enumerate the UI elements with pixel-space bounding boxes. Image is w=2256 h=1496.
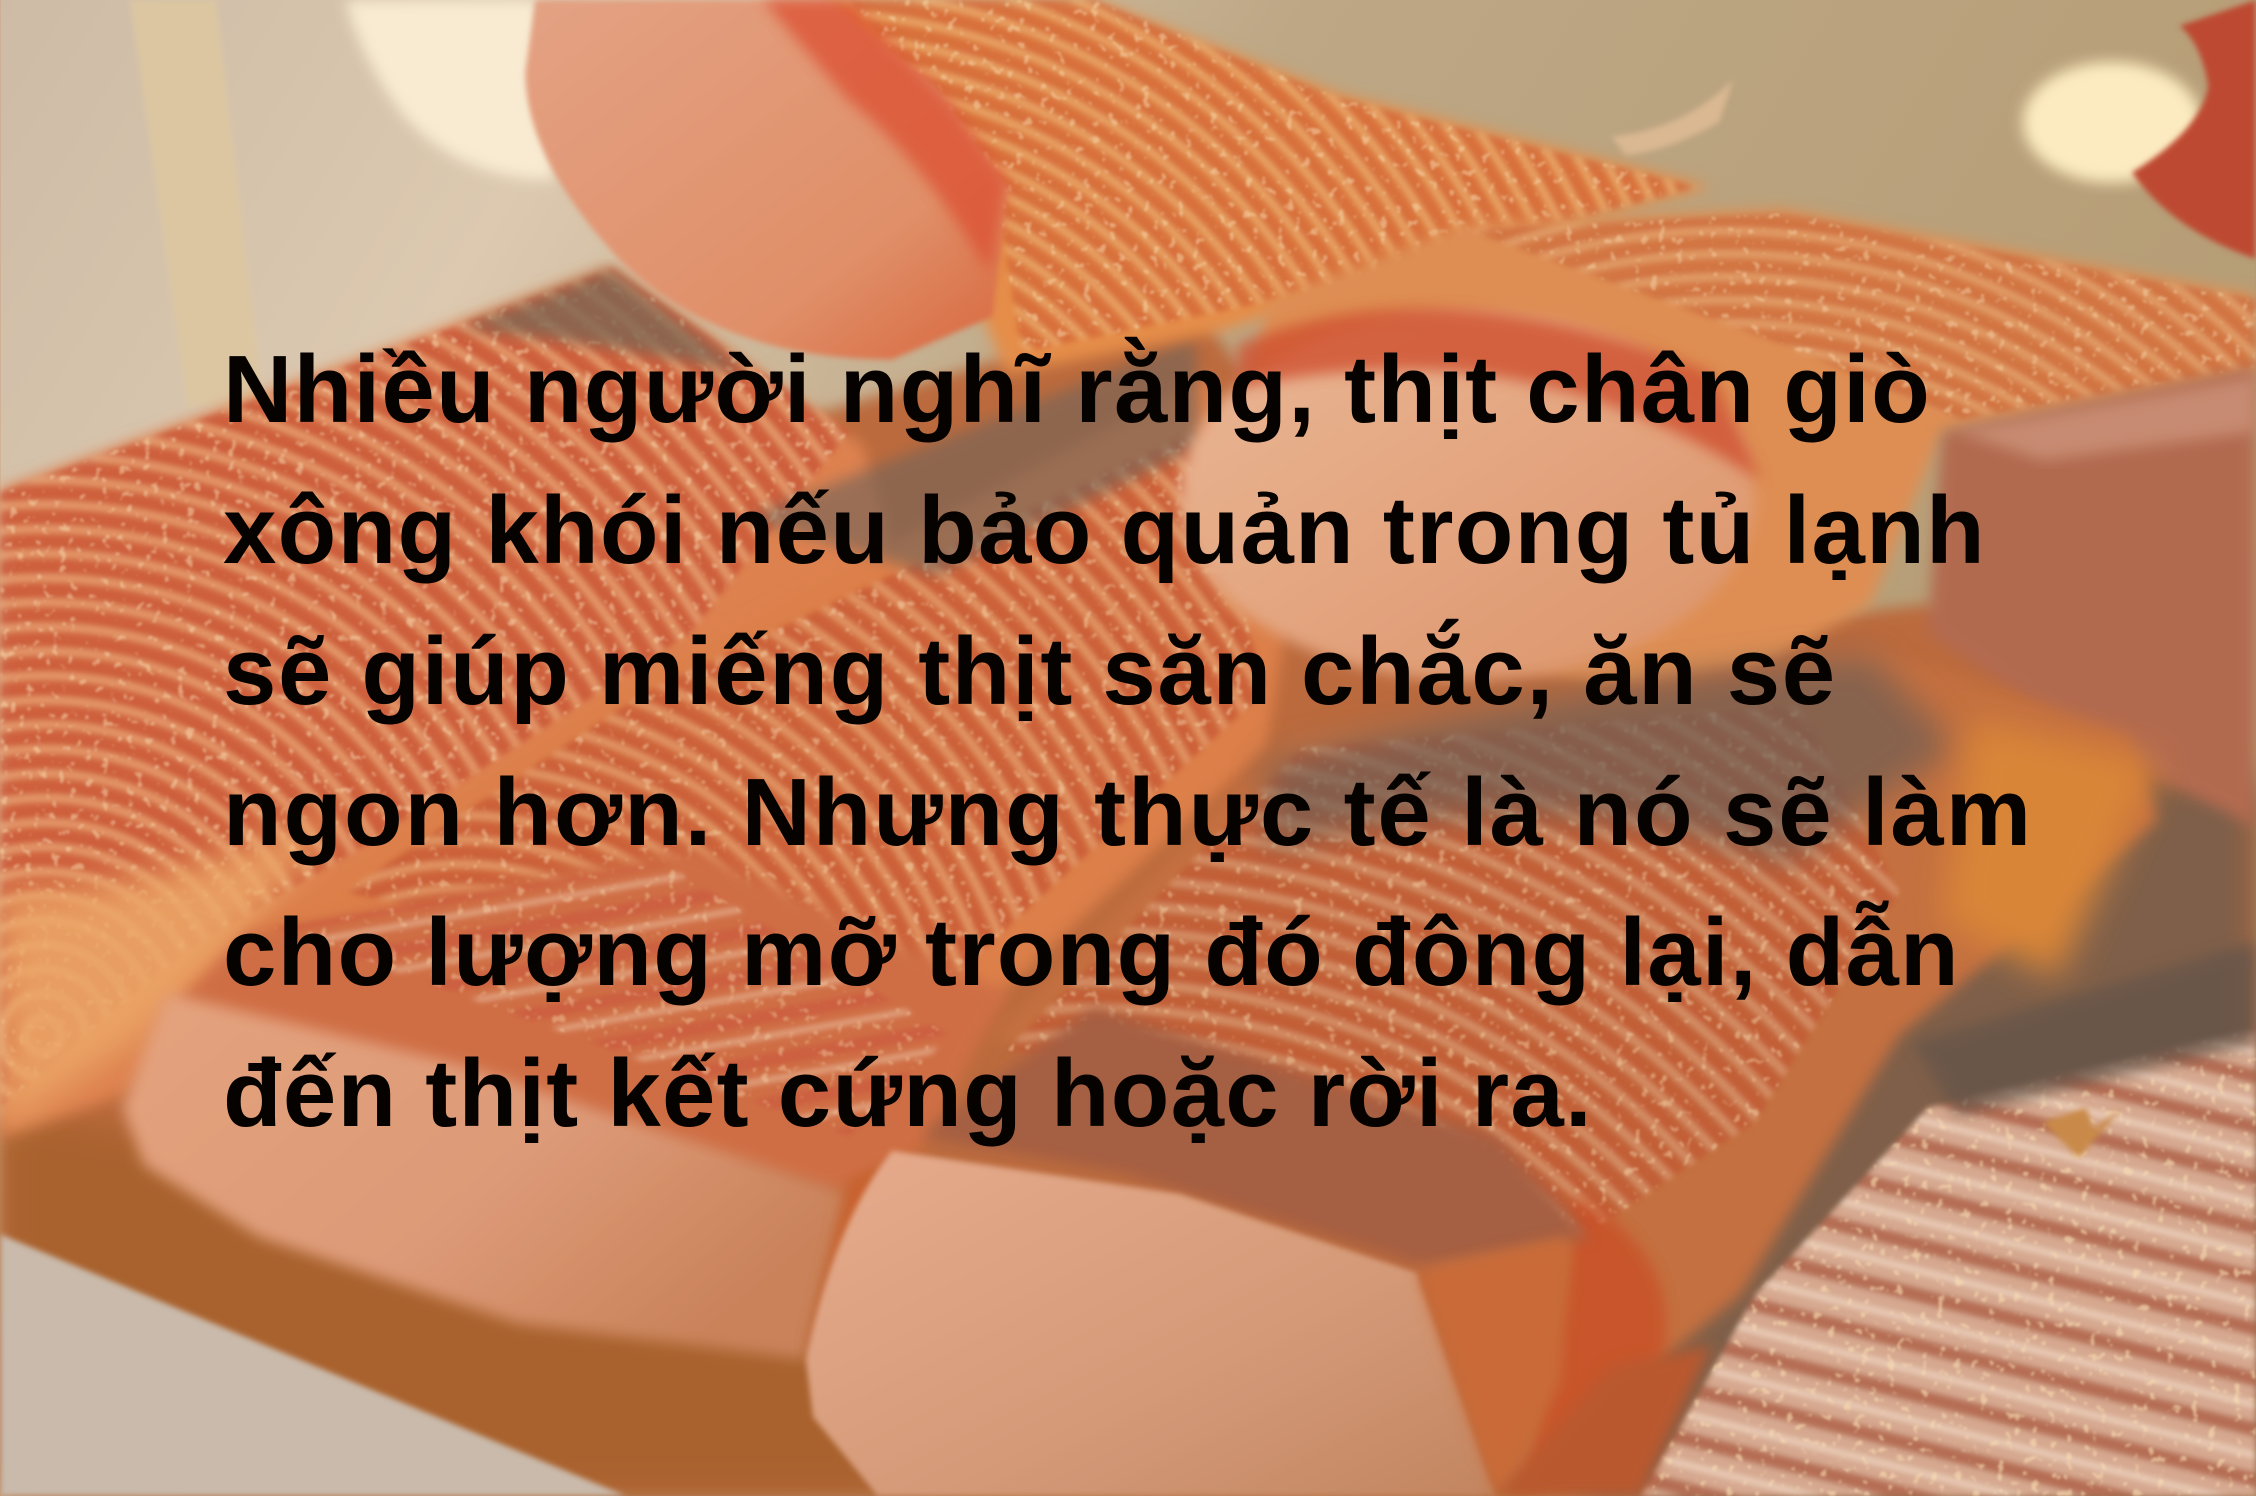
bottom centre cut end: [806, 1151, 1496, 1496]
steel tray: [0, 1234, 626, 1496]
bottom right ham: [1496, 942, 2256, 1496]
sauce and lower base: [0, 1108, 1583, 1496]
bright bowl in background: [345, 0, 554, 180]
centre lower ham skin: [993, 647, 2158, 1496]
top right corner piece: [2023, 62, 2201, 183]
text block: six lines of Vietnamese copy: ngon hơn. Nhưng thực tế là nó sẽ làm: [223, 759, 2033, 866]
top ham cut end: [525, 0, 1007, 360]
bottom left ham skin band: [173, 849, 1007, 1194]
left ham: [0, 266, 906, 1136]
text block: six lines of Vietnamese copy: Nhiều người nghĩ rằng, thịt chân giò: [223, 336, 1931, 443]
middle ham: [245, 338, 1295, 1180]
text block: six lines of Vietnamese copy: xông khói nếu bảo quản trong tủ lạnh: [223, 477, 1986, 584]
bottom left cut end: [123, 993, 849, 1359]
far right dark ham: [1928, 367, 2256, 827]
small crumb on the wall: [1611, 79, 1734, 155]
right ham cut end: [1180, 312, 1755, 680]
right ham skin: [1223, 209, 2256, 705]
text block: six lines of Vietnamese copy: đến thịt kết cứng hoặc rời ra.: [223, 1040, 1593, 1147]
top ham skin: [820, 0, 1712, 374]
text block: six lines of Vietnamese copy: sẽ giúp miếng thịt săn chắc, ăn sẽ: [223, 618, 1837, 725]
bottom centre ham skin edge: [921, 1007, 1590, 1266]
text block: six lines of Vietnamese copy: cho lượng mỡ trong đó đông lại, dẫn: [223, 899, 1960, 1006]
vertical rod: [130, 0, 263, 406]
ham underlay filling gaps: [0, 302, 2256, 1496]
